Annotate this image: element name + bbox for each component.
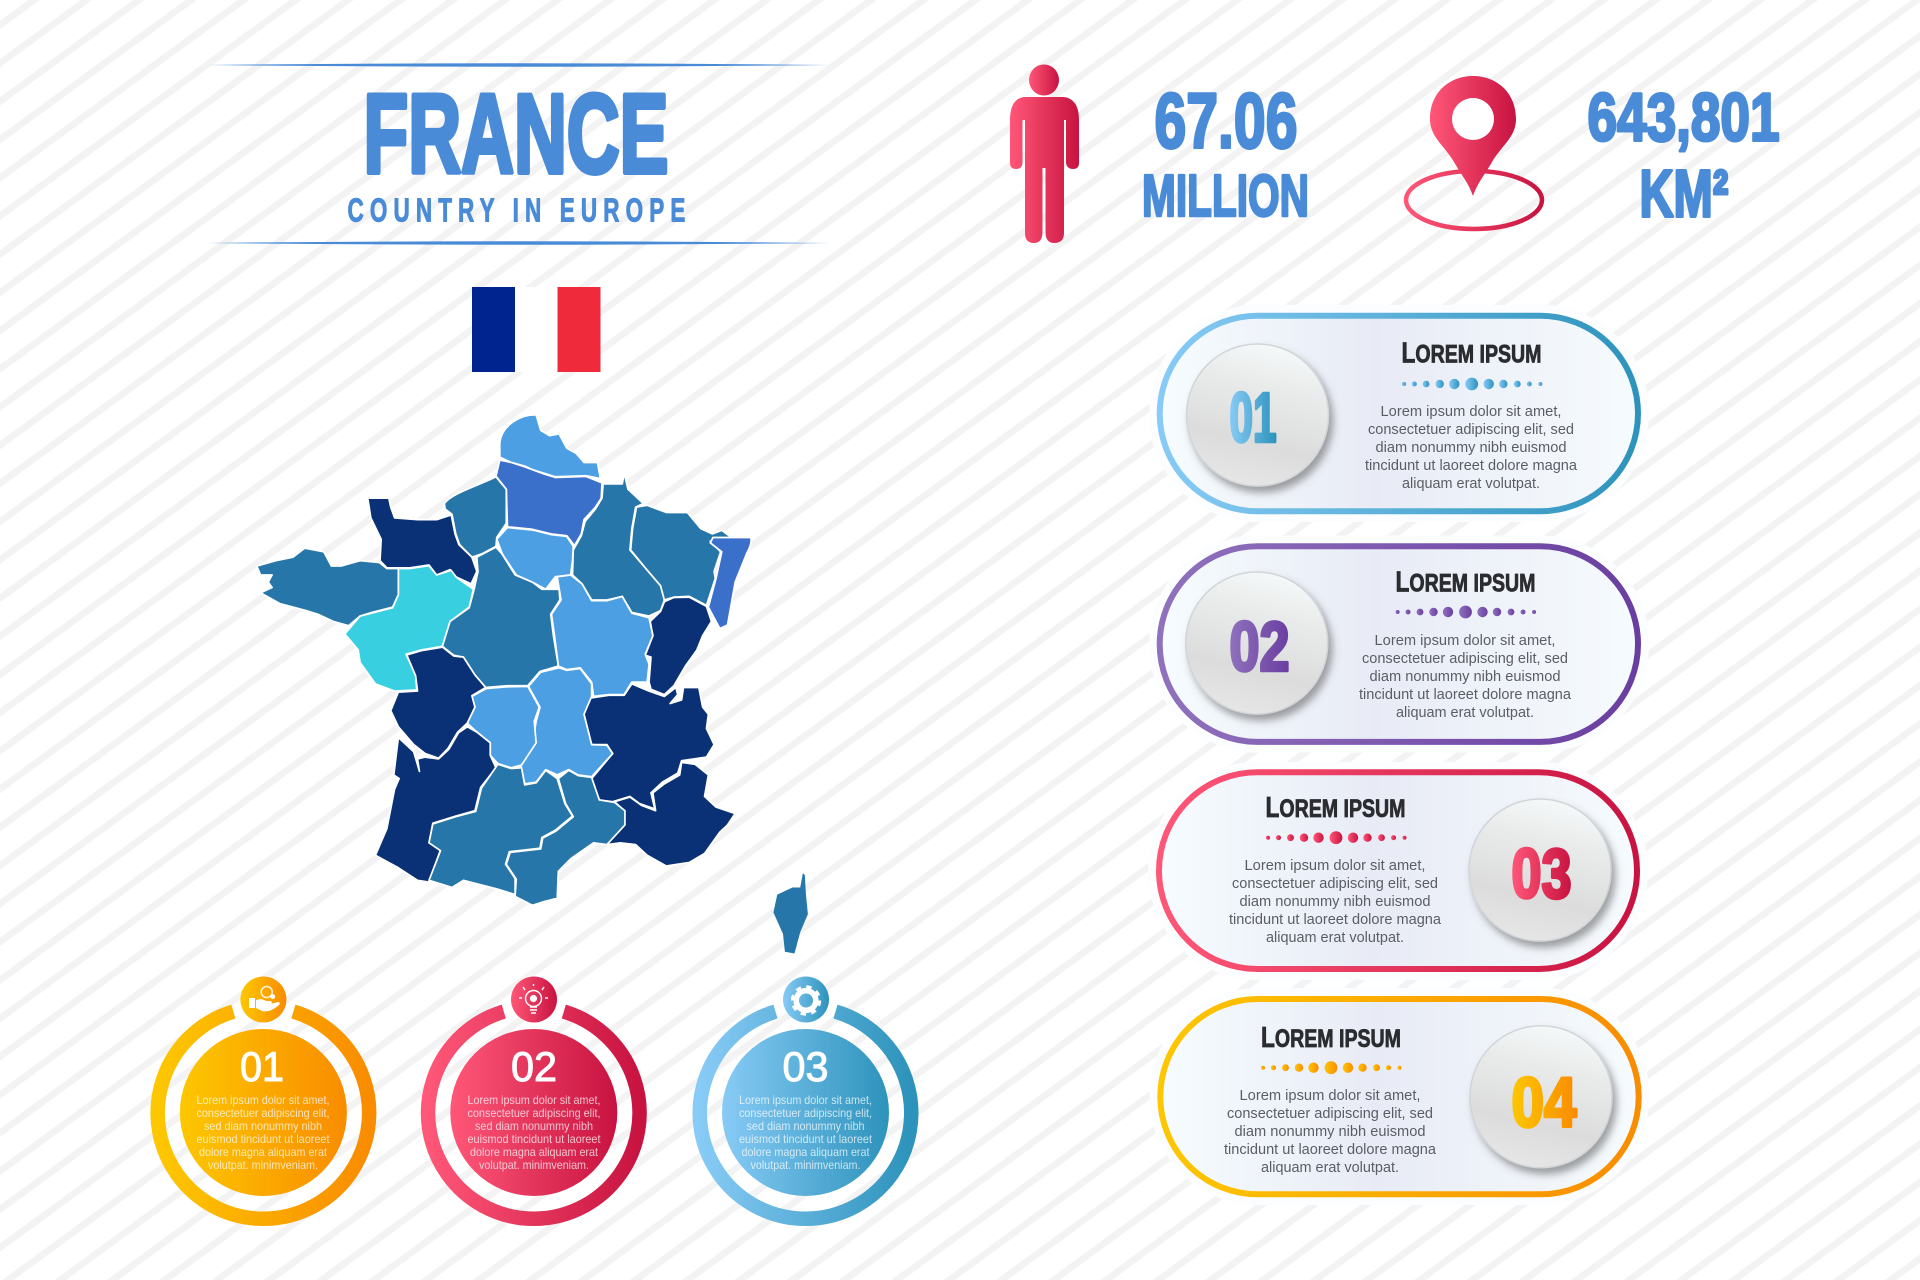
description: consectetuer adipiscing elit, sed — [1232, 876, 1438, 892]
region: Bourgogne — [551, 575, 653, 696]
region: Aquitaine — [375, 727, 496, 882]
heading: LOREM IPSUM — [1266, 792, 1406, 824]
circle card 03 — [700, 976, 911, 1219]
description: diam nonummy nibh euismod — [1234, 1124, 1426, 1140]
pill panel 02 — [1149, 536, 1649, 752]
region: Provence — [607, 762, 735, 866]
description: Lorem ipsum dolor sit amet, — [1374, 633, 1556, 649]
pill panel 03 — [1148, 762, 1648, 980]
description: tincidunt ut laoreet dolore magna — [1229, 912, 1442, 928]
pill panel 04 — [1150, 988, 1650, 1205]
description — [1365, 404, 1578, 492]
description: dolore magna aliquam erat — [470, 1145, 599, 1159]
region: Ile-de-France — [497, 527, 573, 589]
description: Lorem ipsum dolor sit amet, — [1240, 1088, 1420, 1104]
description: euismod tincidunt ut laoreet — [468, 1132, 601, 1146]
description: consectetuer adipiscing elit, — [468, 1106, 600, 1120]
population stat — [1010, 64, 1309, 243]
description: tincidunt ut laoreet dolore magna — [1224, 1142, 1437, 1158]
number 02: 02 — [511, 1043, 557, 1090]
dots divider — [1396, 606, 1536, 618]
population unit: MILLION — [1142, 163, 1309, 229]
icon: light bulb — [511, 976, 557, 1022]
description — [1229, 858, 1442, 946]
dots divider — [1266, 831, 1406, 844]
icon: person — [1010, 64, 1079, 243]
description: Lorem ipsum dolor sit amet, — [196, 1093, 330, 1107]
description: Lorem ipsum dolor sit amet, — [468, 1093, 600, 1107]
description: Lorem ipsum dolor sit amet, — [739, 1093, 872, 1107]
description: Lorem ipsum dolor sit amet, — [1244, 858, 1426, 874]
description: sed diam nonummy nibh — [746, 1119, 864, 1133]
description: dolore magna aliquam erat — [742, 1145, 870, 1159]
description: volutpat. minimveniam. — [208, 1158, 318, 1172]
description: volutpat. minimveniam. — [750, 1158, 860, 1172]
icon: hand with gears — [240, 976, 286, 1022]
title block — [207, 63, 830, 245]
region: Corsica — [773, 873, 808, 954]
region: Basse-Normandie — [368, 498, 477, 584]
description: consectetuer adipiscing elit, — [196, 1106, 330, 1120]
description: tincidunt ut laoreet dolore magna — [1365, 458, 1578, 474]
circle card 01 — [158, 976, 369, 1219]
description: aliquam erat volutpat. — [1261, 1160, 1399, 1176]
description: diam nonummy nibh euismod — [1370, 669, 1560, 685]
subtitle: country in Europe: COUNTRY IN EUROPE — [348, 192, 692, 228]
region: Midi-Pyrenees — [429, 764, 573, 895]
dots divider — [1261, 1061, 1402, 1074]
heading: LOREM IPSUM — [1402, 338, 1542, 370]
flag of France — [472, 287, 600, 372]
icon: map pin — [1406, 76, 1542, 229]
region: Bretagne — [257, 548, 398, 626]
title: France: FRANCE — [364, 72, 668, 196]
region: Franche-Comte — [645, 597, 711, 695]
description: aliquam erat volutpat. — [1402, 476, 1540, 492]
description: tincidunt ut laoreet dolore magna — [1359, 687, 1572, 703]
number 03: 03 — [782, 1043, 828, 1090]
description — [196, 1093, 330, 1172]
description: consectetuer adipiscing elit, — [739, 1106, 872, 1120]
description: sed diam nonummy nibh — [204, 1119, 322, 1133]
description: aliquam erat volutpat. — [1266, 930, 1404, 946]
circle card 02 — [428, 976, 640, 1219]
description — [1224, 1088, 1437, 1176]
description: diam nonummy nibh euismod — [1376, 440, 1566, 456]
region: Pays de la Loire — [345, 566, 473, 691]
dots divider — [1402, 378, 1542, 390]
description — [739, 1093, 873, 1172]
number 01: 01 — [240, 1043, 284, 1090]
number 02: 02 — [1230, 607, 1290, 685]
region: Alsace — [708, 537, 751, 629]
region: Champagne — [573, 473, 664, 616]
area stat — [1406, 76, 1780, 232]
pill panel 01 — [1149, 305, 1649, 522]
description: consectetuer adipiscing elit, sed — [1227, 1106, 1433, 1122]
number 01: 01 — [1230, 378, 1276, 456]
description: sed diam nonummy nibh — [475, 1119, 593, 1133]
number 03: 03 — [1512, 835, 1572, 913]
region: Poitou-Charentes — [391, 647, 486, 758]
population number: 67.06 — [1154, 76, 1298, 164]
description: consectetuer adipiscing elit, sed — [1368, 422, 1574, 438]
description: volutpat. minimveniam. — [479, 1158, 589, 1172]
region: Limousin — [467, 686, 539, 768]
region: Picardie — [496, 460, 602, 546]
region: Lorraine — [631, 505, 731, 605]
region: Rhone-Alpes — [584, 684, 714, 809]
description: euismod tincidunt ut laoreet — [196, 1132, 330, 1146]
region: Auvergne — [521, 668, 613, 784]
description — [1359, 633, 1572, 721]
region: Nord — [500, 415, 600, 479]
icon: gear — [783, 976, 829, 1022]
description: consectetuer adipiscing elit, sed — [1362, 651, 1568, 667]
description — [468, 1093, 601, 1172]
region: Centre — [442, 547, 560, 687]
heading: LOREM IPSUM — [1396, 566, 1536, 598]
description: Lorem ipsum dolor sit amet, — [1380, 404, 1562, 420]
description: diam nonummy nibh euismod — [1240, 894, 1430, 910]
heading: LOREM IPSUM — [1261, 1022, 1401, 1054]
area unit: KM² — [1640, 156, 1728, 232]
number 04: 04 — [1512, 1063, 1577, 1141]
region: Haute-Normandie — [444, 477, 506, 557]
description: euismod tincidunt ut laoreet — [739, 1132, 873, 1146]
area number: 643,801 — [1588, 80, 1780, 156]
region: Languedoc — [506, 770, 625, 905]
description: aliquam erat volutpat. — [1396, 705, 1534, 721]
map of France — [257, 415, 808, 954]
description: dolore magna aliquam erat — [199, 1145, 328, 1159]
